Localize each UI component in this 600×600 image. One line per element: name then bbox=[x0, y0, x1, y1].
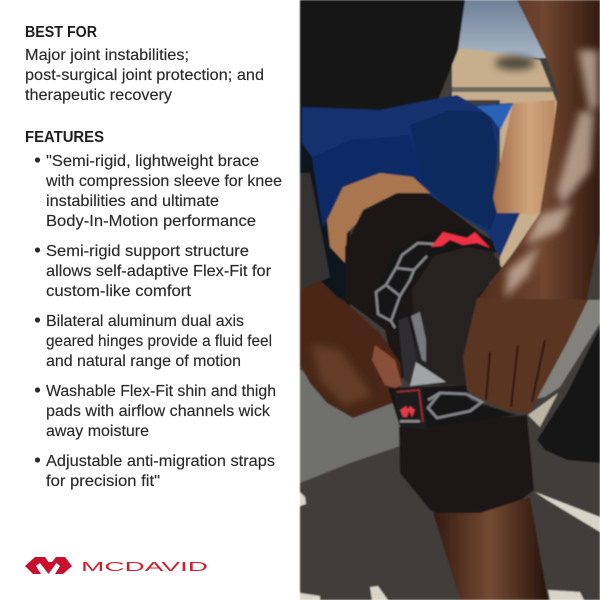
feature 2: support structure bbox=[35, 243, 272, 300]
feature 4: washable pads: Washable Flex-Fit shin and thigh bbox=[46, 383, 276, 400]
upper strap with hexes bbox=[373, 227, 502, 330]
brace upper sleeve bbox=[345, 193, 500, 378]
far thigh bbox=[493, 100, 555, 215]
blue shorts bbox=[302, 95, 520, 257]
logo: McDavid bbox=[25, 557, 208, 574]
finger gaps bbox=[486, 340, 545, 407]
feature 4: washable pads: away moisture bbox=[46, 423, 149, 440]
feature 1: semi-rigid brace: Body-In-Motion performance bbox=[46, 213, 256, 230]
dune shrub bbox=[495, 56, 535, 70]
feature 2: support structure: Semi-rigid support structure bbox=[46, 243, 249, 260]
lower strap bbox=[388, 385, 517, 428]
list: features bbox=[35, 153, 282, 490]
dark shadow behind body bbox=[300, 100, 350, 310]
photo: athlete fastening knee brace bbox=[300, 0, 600, 600]
feature 1: semi-rigid brace: "Semi-rigid, lightweight brace bbox=[46, 153, 259, 170]
shorts highlight bbox=[476, 104, 513, 130]
feature 5: straps bbox=[35, 453, 275, 490]
text block: best for description: Major joint instabilities; bbox=[25, 47, 189, 64]
central knee panel bbox=[412, 247, 502, 385]
brand name: MCDAVID bbox=[81, 560, 208, 574]
panel: white text panel bbox=[0, 0, 300, 600]
road markings bbox=[300, 393, 600, 600]
left hand knuckle light bbox=[312, 345, 372, 405]
red M logo on strap bbox=[431, 232, 490, 248]
torso black shirt bbox=[300, 0, 465, 112]
pavement kerb left bbox=[300, 370, 400, 483]
brace tag with logo bbox=[393, 386, 427, 430]
near thigh skin bbox=[327, 173, 430, 263]
patterned left sleeve bbox=[300, 173, 330, 290]
feature 5: straps: Adjustable anti-migration straps bbox=[46, 453, 275, 470]
text block: best for description bbox=[25, 47, 264, 104]
brace lower sleeve bbox=[399, 415, 534, 519]
asphalt ground bbox=[300, 0, 600, 600]
feature 1: semi-rigid brace: instabilities and ultimate bbox=[46, 193, 219, 210]
feature 3: hinges: geared hinges provide a fluid feel bbox=[46, 333, 272, 350]
pavement right bbox=[530, 300, 600, 400]
lower shorts hem bbox=[312, 135, 425, 227]
feature 2: support structure: allows self-adaptive Flex-Fit for bbox=[46, 263, 272, 280]
feature 3: hinges: Bilateral aluminum dual axis bbox=[46, 313, 244, 330]
feature 4: washable pads: pads with airflow channels wick bbox=[46, 403, 271, 420]
feature 2: support structure: custom-like comfort bbox=[46, 283, 192, 300]
sand dune bbox=[452, 48, 560, 300]
heading: best for: BEST FOR bbox=[25, 24, 97, 41]
shin bbox=[433, 497, 548, 600]
feature 1: semi-rigid brace: with compression sleeve for knee bbox=[45, 173, 282, 190]
heading: features: FEATURES bbox=[25, 129, 104, 146]
left thumb bbox=[372, 345, 402, 388]
right arm bbox=[477, 0, 600, 300]
right hand bbox=[463, 298, 588, 413]
feature 3: hinges: and natural range of motion bbox=[46, 353, 241, 370]
shorts shadow folds bbox=[410, 110, 497, 230]
text block: best for description: therapeutic recovery bbox=[25, 87, 172, 104]
horizon rail bbox=[452, 87, 552, 92]
text block: best for description: post-surgical joint protection; and bbox=[25, 67, 264, 84]
feature 5: straps: for precision fit" bbox=[46, 473, 160, 490]
icon: McDavid M mark bbox=[25, 557, 72, 574]
metal hinge bbox=[398, 312, 446, 386]
feature 4: washable pads bbox=[35, 383, 276, 440]
left hand bbox=[300, 280, 402, 418]
shoe bbox=[537, 327, 600, 463]
sky bbox=[450, 0, 560, 58]
forearm highlights bbox=[505, 50, 598, 298]
feature 1: semi-rigid brace bbox=[35, 153, 282, 230]
feature 3: hinges bbox=[35, 313, 272, 370]
